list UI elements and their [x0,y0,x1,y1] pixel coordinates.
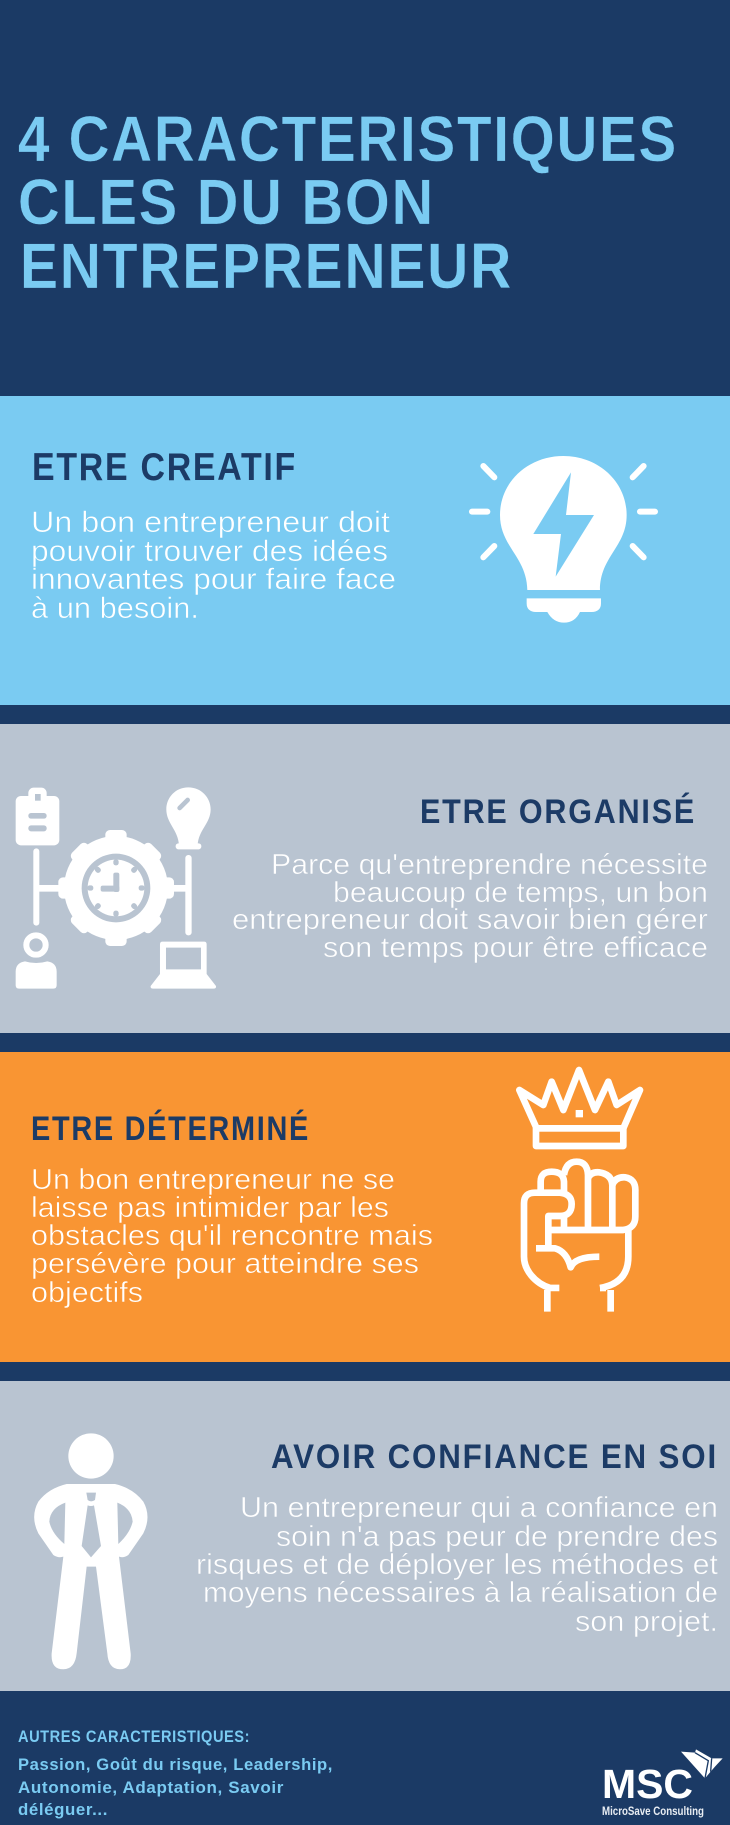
text block: confiance: moyens nécessaires à la réalisation de [203,1577,718,1609]
panel: etre determine [0,1052,730,1362]
bulb [166,787,211,849]
text block: determine: obstacles qu'il rencontre mais [31,1220,433,1252]
text block: determine: persévère pour atteindre ses [31,1248,419,1280]
icon: organisation gear and clock [16,787,216,989]
logo: MicroSave Consulting: MicroSave Consulting [602,1806,704,1818]
text block: organise: son temps pour être efficace [323,932,708,964]
panel: etre creatif [0,396,730,705]
title: CLES DU BON [18,166,435,238]
text block: creatif: innovantes pour faire face [31,563,396,596]
gear [58,830,174,946]
footer: other characteristics [18,1728,333,1819]
icon: light bulb [472,456,655,623]
text block: confiance: Un entrepreneur qui a confiance en [240,1492,718,1524]
person [16,935,57,989]
logo: MicroSave Consulting [602,1749,723,1818]
heading: etre determine: ETRE DÉTERMINÉ [31,1110,310,1148]
crown [519,1070,640,1146]
footer text [18,1756,333,1819]
heading: etre creatif: ETRE CREATIF [32,446,297,489]
icon: standing businessman [34,1433,147,1669]
panel: etre organise [0,724,730,1033]
footer heading: AUTRES CARACTERISTIQUES: [18,1728,250,1746]
text block: determine [31,1164,433,1309]
footer text: Passion, Goût du risque, Leadership, [18,1756,333,1774]
logo: MicroSave Consulting: MSC [602,1761,693,1807]
heading: etre organise: ETRE ORGANISÉ [420,793,696,831]
text block: confiance: son projet. [575,1606,718,1638]
title [18,103,678,302]
title: ENTREPRENEUR [20,230,513,302]
laptop [151,942,216,989]
text block: creatif: pouvoir trouver des idées [31,535,388,568]
text block: creatif: Un bon entrepreneur doit [31,506,391,539]
text block: determine: Un bon entrepreneur ne se [31,1164,395,1196]
text block: organise: Parce qu'entreprendre nécessite [271,849,708,881]
text block: determine: laisse pas intimider par les [31,1192,389,1224]
clipboard [16,788,59,845]
fist [524,1162,635,1312]
text block: creatif [31,506,396,625]
footer text: déléguer... [18,1801,108,1819]
panel: avoir confiance en soi [0,1381,730,1691]
text block: confiance [196,1492,718,1638]
icon: crown and fist [519,1070,640,1312]
text block: organise [232,849,708,964]
text block: creatif: à un besoin. [31,592,199,625]
footer text: Autonomie, Adaptation, Savoir [18,1779,284,1797]
text block: organise: beaucoup de temps, un bon [333,877,708,909]
text block: organise: entrepreneur doit savoir bien gérer [232,904,708,936]
text block: confiance: soin n'a pas peur de prendre des [276,1521,718,1553]
text block: confiance: risques et de déployer les méthodes et [196,1549,718,1581]
text block: determine: objectifs [31,1277,143,1309]
